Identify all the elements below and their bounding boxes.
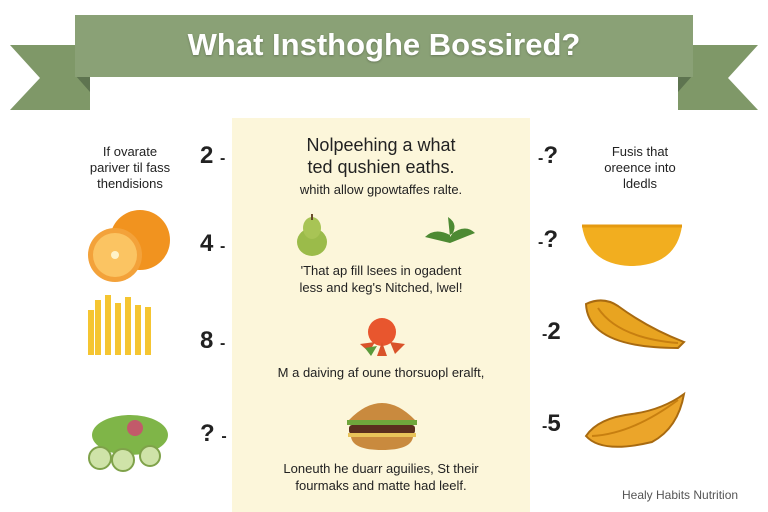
right text: Fusis that: [612, 144, 668, 159]
icon: banana 1: [585, 299, 686, 349]
text block 2: [300, 263, 462, 295]
icon: mango: [582, 224, 682, 266]
icon: orange: [88, 210, 170, 282]
panel: center: [232, 118, 530, 512]
left numbers: 2 -: [200, 142, 225, 169]
text block 3: M a daiving af oune thorsuopl eralft,: [278, 365, 484, 380]
right text: ldedls: [623, 176, 657, 191]
right text: [604, 144, 676, 191]
text block 2: less and keg's Nitched, lwel!: [300, 280, 462, 295]
left text: [90, 144, 170, 191]
left numbers: 4 -: [200, 230, 225, 257]
left text: If ovarate: [103, 144, 157, 159]
left text: pariver til fass: [90, 160, 170, 175]
icon: tomato: [360, 318, 405, 356]
footer credit: Healy Habits Nutrition: [622, 488, 738, 502]
left text: thendisions: [97, 176, 163, 191]
icon: fries: [88, 295, 151, 355]
right numbers: -5: [542, 410, 561, 437]
center heading: ted qushien eaths.: [307, 157, 455, 177]
text block 4: Loneuth he duarr aguilies, St their: [283, 461, 479, 476]
icon: banana 2: [584, 392, 686, 448]
right numbers: -?: [538, 142, 558, 169]
icon: pear: [297, 214, 327, 256]
icon: leaves: [425, 217, 475, 243]
banner: [10, 15, 758, 110]
icon: salad: [88, 415, 168, 472]
text block 2: 'That ap fill lsees in ogadent: [301, 263, 461, 278]
right numbers: [538, 142, 561, 437]
left numbers: [200, 142, 227, 447]
left numbers: ? -: [200, 420, 227, 447]
icon: burger: [347, 403, 417, 450]
center heading: Nolpeehing a what: [306, 135, 456, 155]
right numbers: -2: [542, 318, 561, 345]
left numbers: 8 -: [200, 327, 225, 354]
center heading: [306, 135, 456, 177]
center subtext: whith allow gpowtaffes ralte.: [300, 182, 462, 197]
right numbers: -?: [538, 226, 558, 253]
text block 4: [283, 461, 479, 493]
text block 4: fourmaks and matte had leelf.: [295, 478, 467, 493]
right text: oreence into: [604, 160, 676, 175]
title: What Insthoghe Bossired?: [188, 27, 580, 62]
